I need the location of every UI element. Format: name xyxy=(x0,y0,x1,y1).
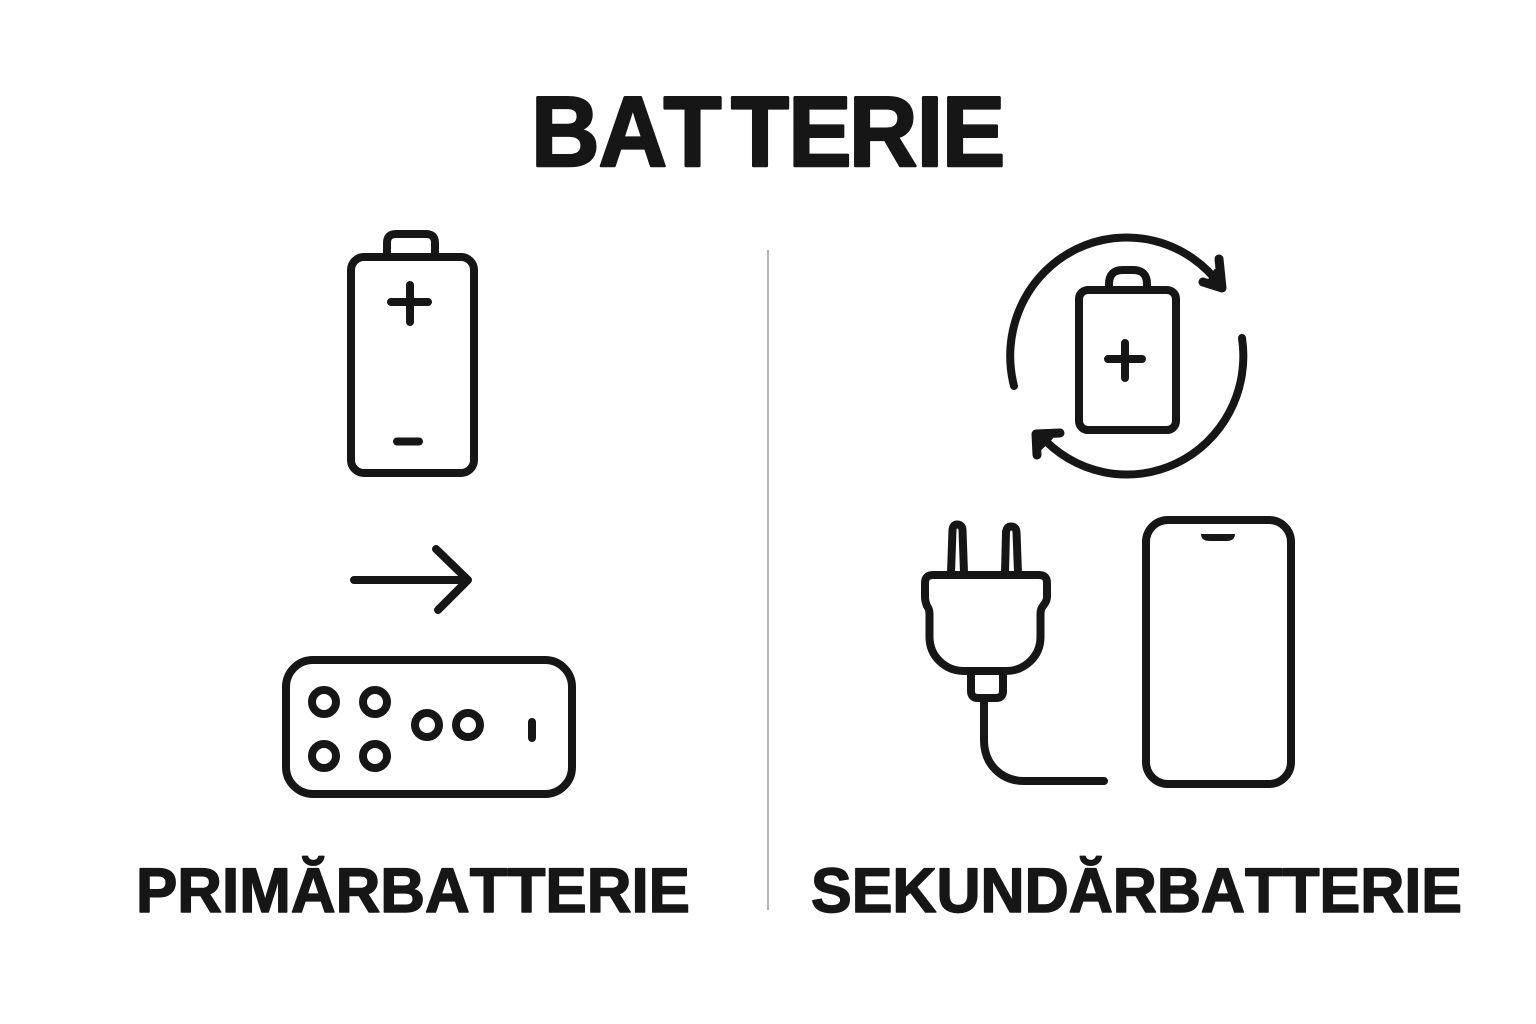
arrow xyxy=(354,549,468,610)
label: primary battery: PRIMĂRBATTERIE xyxy=(136,856,690,926)
icon: charging plug with cable xyxy=(925,524,1104,781)
icon: smartphone xyxy=(1146,520,1291,784)
icon: single-use battery xyxy=(351,234,474,473)
panel: primary battery xyxy=(136,234,690,926)
icon: rechargeable battery with cycle arrows xyxy=(1010,237,1243,475)
title: BATTERIE xyxy=(531,76,1005,188)
panel divider xyxy=(767,250,769,910)
icon: device with button cells xyxy=(286,660,572,794)
panel: secondary battery xyxy=(811,237,1462,926)
label: secondary battery: SEKUNDĂRBATTERIE xyxy=(811,856,1462,926)
